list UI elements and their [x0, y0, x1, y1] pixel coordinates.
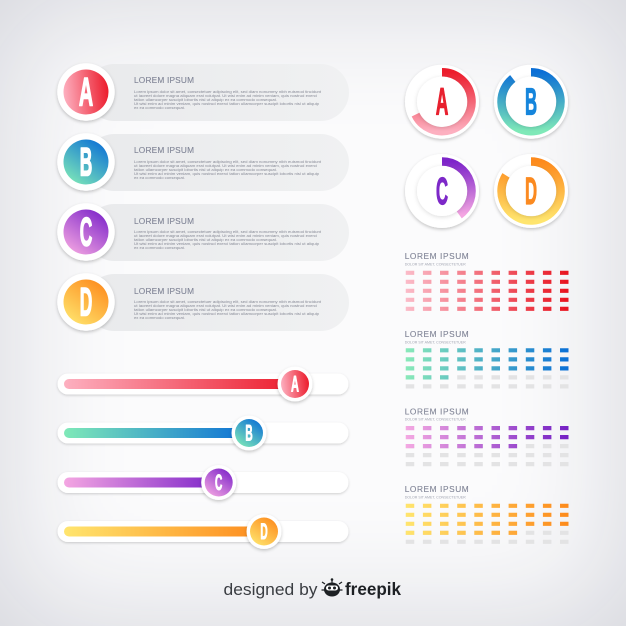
badge B — [57, 133, 115, 191]
text block A — [134, 89, 322, 110]
text block A: tation ullamcorper suscipit lobortis nisl ut aliquip ex ea commodo consequat. — [134, 97, 277, 102]
donut chart D — [494, 154, 568, 228]
text block D: tation ullamcorper suscipit lobortis nisl ut aliquip ex ea commodo consequat. — [134, 307, 277, 312]
heading A: LOREM IPSUM — [134, 75, 194, 85]
badge C — [57, 203, 115, 261]
matrix A cells — [406, 271, 568, 311]
badge A — [57, 63, 115, 121]
freepik wordmark: freepik — [345, 579, 401, 599]
heading C: LOREM IPSUM — [134, 216, 194, 226]
slider D — [58, 514, 348, 549]
panel: option D — [57, 273, 349, 331]
text block B — [134, 159, 322, 180]
text block D: ex ea commodo consequat. — [134, 315, 185, 320]
matrix A heading: LOREM IPSUM — [405, 251, 469, 261]
slider C — [58, 465, 348, 500]
dot matrix D — [405, 484, 568, 544]
matrix B heading: LOREM IPSUM — [405, 329, 469, 339]
icon: freepik mascot — [322, 578, 342, 596]
text block D: Lorem ipsum dolor sit amet, consectetuer adipiscing elit, sed diam nonummy nibh euismod tincidunt — [134, 299, 322, 304]
slider A: A — [291, 371, 299, 397]
text block B: Lorem ipsum dolor sit amet, consectetuer adipiscing elit, sed diam nonummy nibh euismod tincidunt — [134, 159, 322, 164]
badge D — [57, 273, 115, 331]
footer credit — [224, 578, 401, 599]
panel: option C — [57, 203, 349, 261]
text block C: ut laoreet dolore magna aliquam erat volutpat. Ut wisi enim ad minim veniam, quis nostrud exerci — [134, 233, 317, 238]
text block C: Lorem ipsum dolor sit amet, consectetuer adipiscing elit, sed diam nonummy nibh euismod tincidunt — [134, 229, 322, 234]
matrix C subheading: DOLOR SIT AMET, CONSECTETUER — [405, 418, 466, 422]
panel: option A — [57, 63, 349, 121]
designed by text: designed by — [224, 580, 318, 599]
dot matrix A — [405, 251, 568, 311]
slider C: C — [215, 471, 222, 495]
matrix C cells — [406, 426, 568, 466]
badge C: C — [80, 211, 92, 255]
text block C: ex ea commodo consequat. — [134, 245, 185, 250]
text block D: Ut wisi enim ad minim veniam, quis nostrud exerci tation ullamcorper suscipit lobortis nisl ut aliquip — [134, 311, 319, 316]
matrix B cells — [406, 348, 568, 388]
matrix B subheading: DOLOR SIT AMET, CONSECTETUER — [405, 340, 466, 344]
badge A: A — [79, 70, 93, 114]
text block C — [134, 229, 322, 250]
text block A: Lorem ipsum dolor sit amet, consectetuer adipiscing elit, sed diam nonummy nibh euismod tincidunt — [134, 89, 322, 94]
pill A — [86, 64, 349, 121]
text block B: tation ullamcorper suscipit lobortis nisl ut aliquip ex ea commodo consequat. — [134, 167, 277, 172]
donut chart A — [405, 65, 479, 139]
text block B: ex ea commodo consequat. — [134, 175, 185, 180]
text block B: ut laoreet dolore magna aliquam erat volutpat. Ut wisi enim ad minim veniam, quis nostrud exerci — [134, 163, 317, 168]
donut chart C: C — [436, 170, 448, 213]
slider B: B — [245, 421, 253, 446]
matrix A subheading: DOLOR SIT AMET, CONSECTETUER — [405, 262, 466, 266]
text block D — [134, 299, 322, 320]
dot matrix B — [405, 329, 568, 388]
dot matrix C — [405, 406, 568, 466]
badge B: B — [80, 141, 92, 185]
text block C: Ut wisi enim ad minim veniam, quis nostrud exerci tation ullamcorper suscipit lobortis nisl ut aliquip — [134, 241, 319, 246]
matrix C heading: LOREM IPSUM — [405, 406, 469, 416]
donut chart B — [494, 65, 568, 139]
text block A: Ut wisi enim ad minim veniam, quis nostrud exerci tation ullamcorper suscipit lobortis nisl ut aliquip — [134, 101, 319, 106]
text block B: Ut wisi enim ad minim veniam, quis nostrud exerci tation ullamcorper suscipit lobortis nisl ut aliquip — [134, 171, 319, 176]
heading B: LOREM IPSUM — [134, 145, 194, 155]
text block A: ut laoreet dolore magna aliquam erat volutpat. Ut wisi enim ad minim veniam, quis nostrud exerci — [134, 93, 317, 98]
badge D: D — [80, 281, 92, 325]
pill D — [86, 274, 349, 331]
pill B — [86, 134, 349, 191]
panel: option B — [57, 133, 349, 191]
donut chart D: D — [525, 170, 537, 213]
matrix D heading: LOREM IPSUM — [405, 484, 469, 494]
donut chart A: A — [436, 81, 448, 124]
text block D: ut laoreet dolore magna aliquam erat volutpat. Ut wisi enim ad minim veniam, quis nostrud exerci — [134, 303, 317, 308]
text block A: ex ea commodo consequat. — [134, 105, 185, 110]
pill C — [86, 204, 349, 261]
slider B — [58, 416, 348, 450]
slider A — [58, 366, 348, 402]
matrix D subheading: DOLOR SIT AMET, CONSECTETUER — [405, 495, 466, 499]
matrix D cells — [406, 504, 568, 544]
donut chart B: B — [525, 81, 537, 124]
slider D: D — [260, 520, 268, 544]
text block C: tation ullamcorper suscipit lobortis nisl ut aliquip ex ea commodo consequat. — [134, 237, 277, 242]
donut chart C — [405, 154, 479, 228]
heading D: LOREM IPSUM — [134, 286, 194, 296]
